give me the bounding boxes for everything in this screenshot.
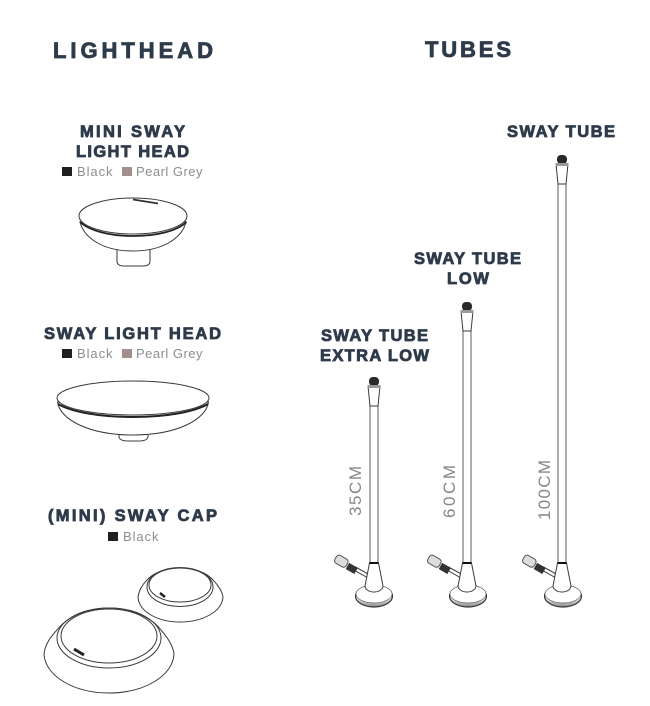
heading: (mini) sway cap: (MINI) SWAY CAP [48,507,217,525]
heading: lighthead: LIGHTHEAD [53,38,213,63]
heading: mini sway light head [76,123,189,161]
colour legend: black and pearl grey [62,346,203,361]
panel: sway light head [44,325,221,441]
panel: mini sway light head [62,123,203,266]
icon: mini sway light head [79,198,187,266]
heading: sway tube low [414,250,521,288]
colour legend: black and pearl grey [62,164,203,179]
panel: sway tube low [414,250,521,607]
heading: sway tube extra low: EXTRA LOW [320,347,429,365]
icon: small cap [138,568,223,622]
panel: sway tube [507,123,615,607]
heading: sway tube extra low [320,327,429,365]
heading: sway tube: SWAY TUBE [507,123,615,141]
icon: large cap [44,608,174,693]
heading: sway tube extra low: SWAY TUBE [321,327,428,345]
icon: tube 35 cm [333,377,392,607]
dimension: 100 cm: 100CM [535,460,554,520]
colour legend: black and pearl grey: Pearl Grey [136,164,203,179]
icon: tube 60 cm [426,302,486,607]
dimension: 35 cm: 35CM [346,466,365,516]
heading: sway tube low: LOW [447,270,489,288]
colour legend: black: Black [123,529,159,544]
heading: sway light head: SWAY LIGHT HEAD [44,325,221,343]
colour legend: black and pearl grey: Pearl Grey [136,346,203,361]
panel: mini sway cap [44,507,223,693]
icon: tube 100 cm [521,155,582,607]
panel: sway tube extra low [320,327,429,607]
heading: sway tube low: SWAY TUBE [414,250,521,268]
heading: tubes: TUBES [425,37,511,62]
colour legend: black and pearl grey: Black [77,164,113,179]
colour legend: black and pearl grey: Black [77,346,113,361]
icon: sway light head [57,381,209,441]
dimension: 60 cm: 60CM [440,465,459,518]
heading: mini sway light head: LIGHT HEAD [76,143,189,161]
heading: mini sway light head: MINI SWAY [80,123,185,141]
